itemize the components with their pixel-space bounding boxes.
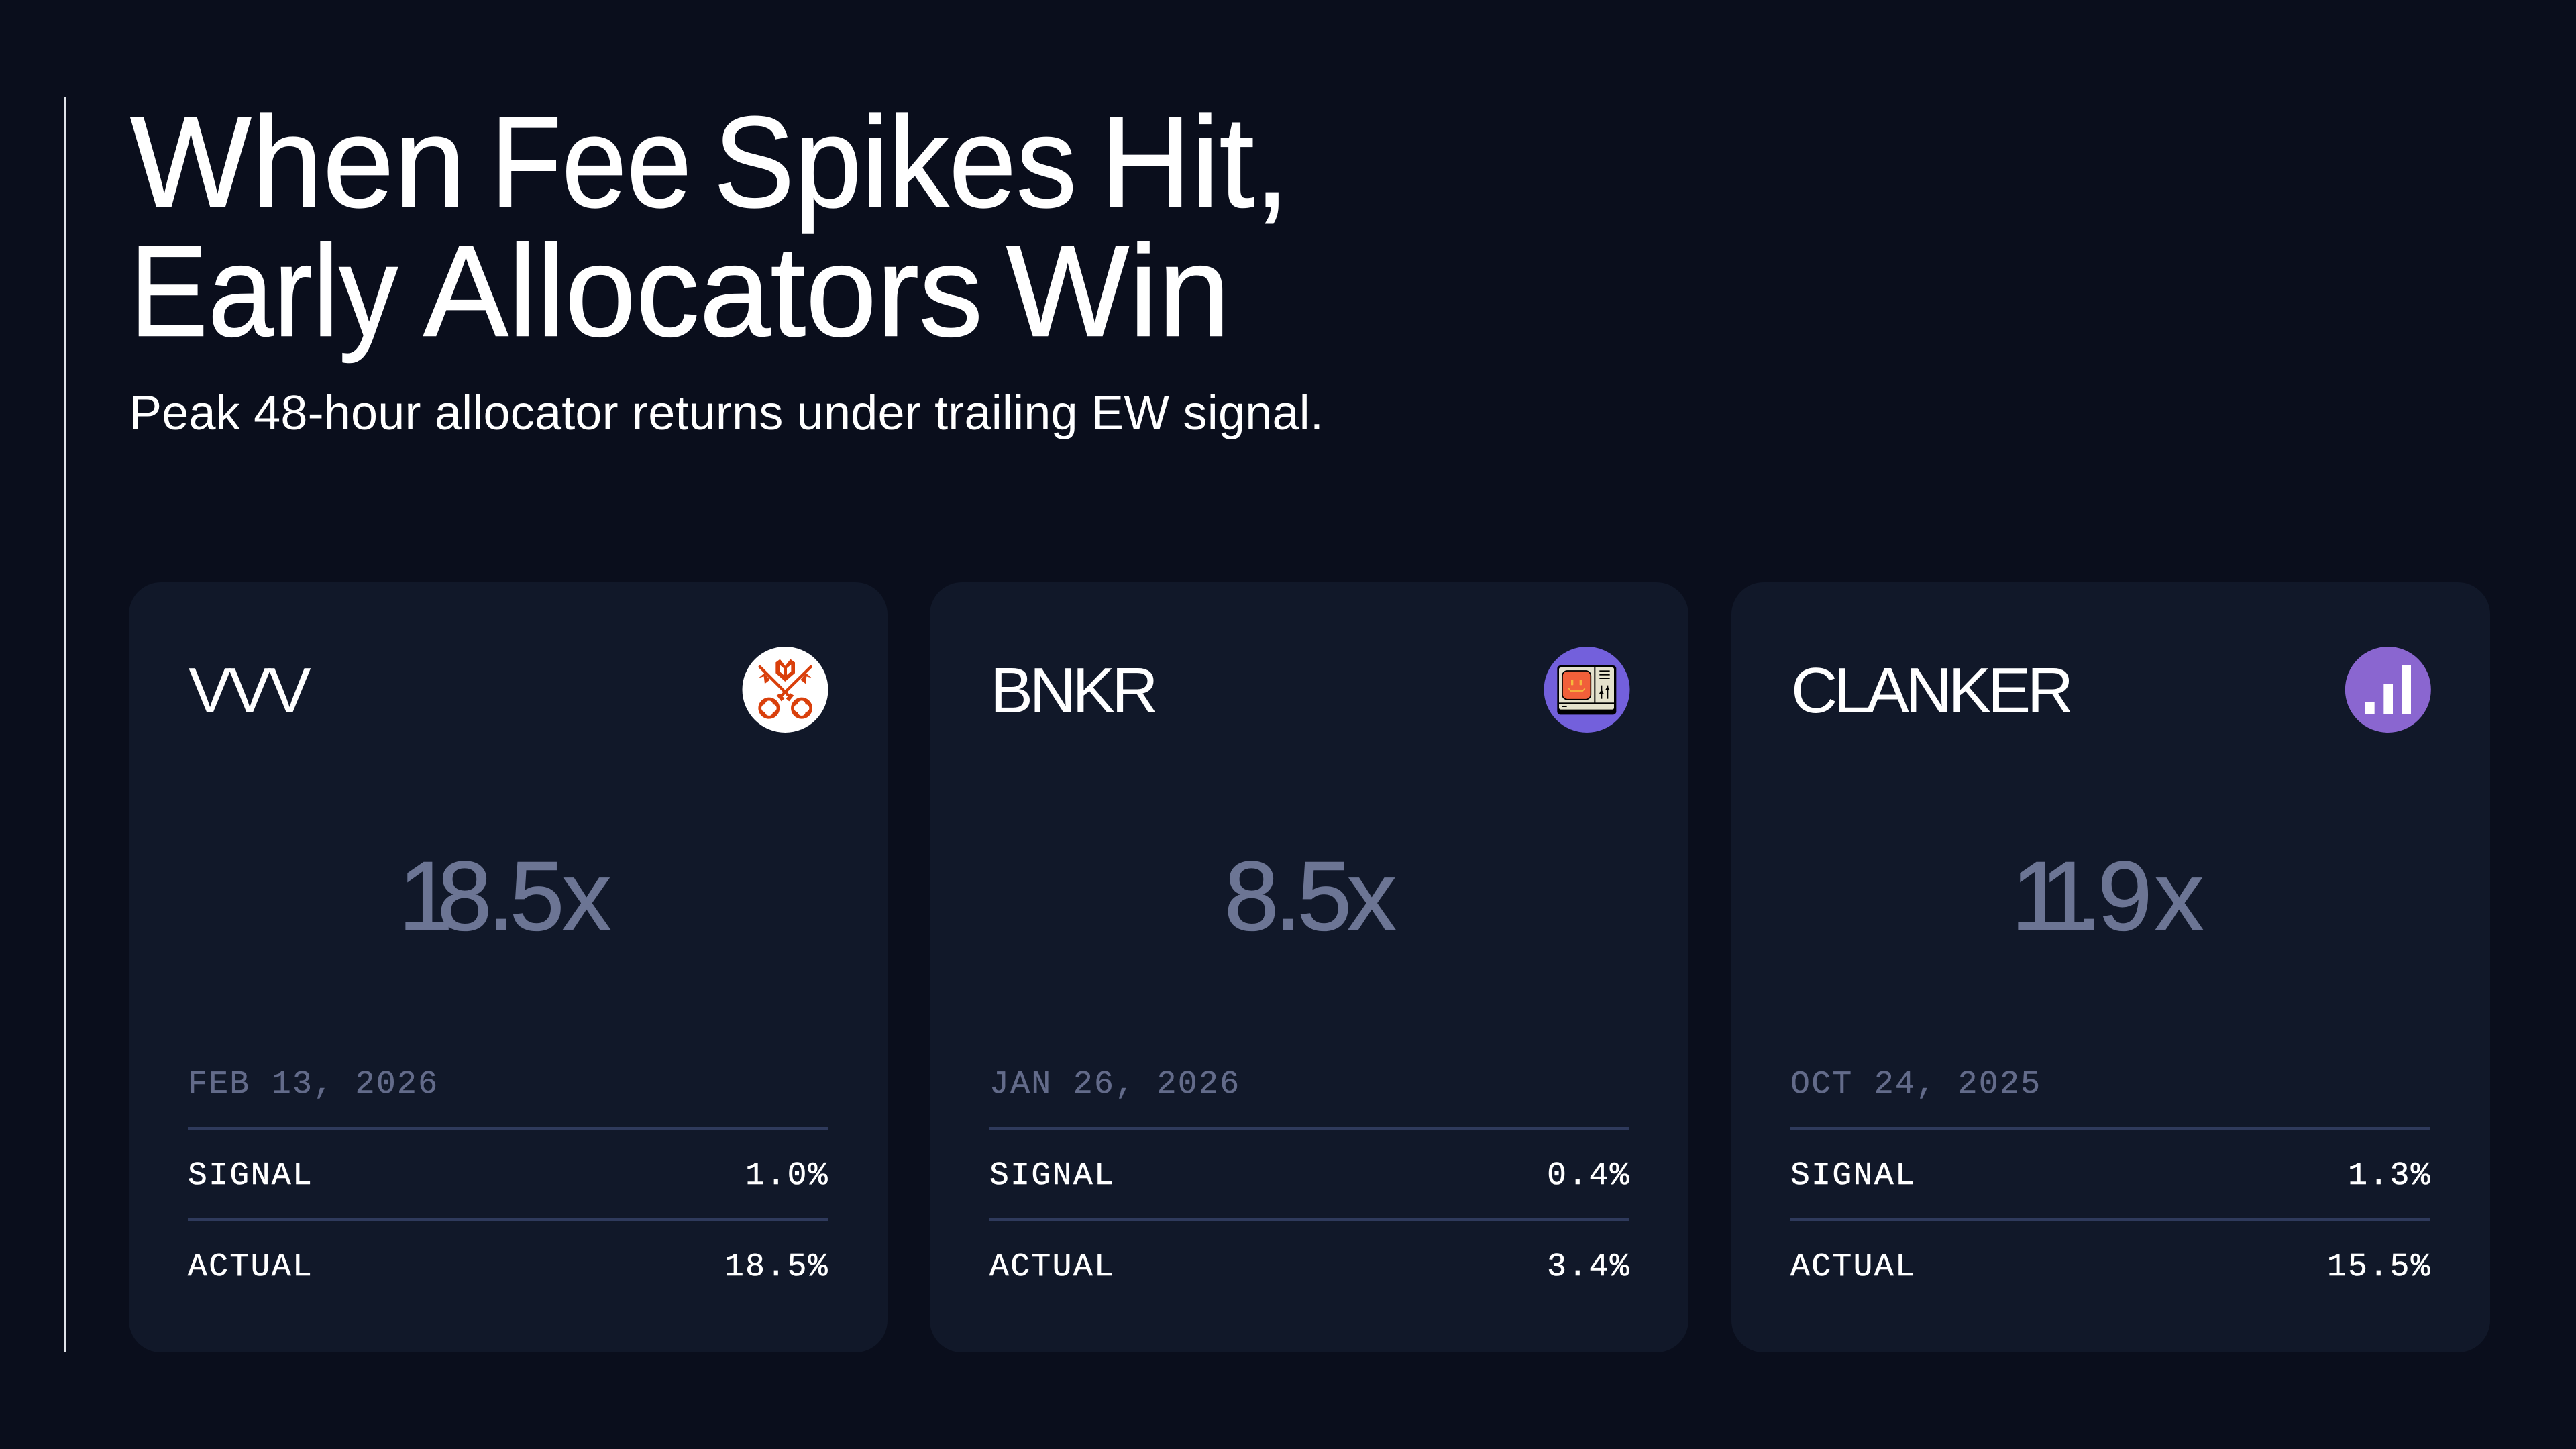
signal row: 1.3% xyxy=(2348,1158,2432,1194)
actual row: 15.5% xyxy=(2327,1249,2432,1285)
panel: BNKR xyxy=(930,582,1688,1352)
signal row xyxy=(188,1158,829,1194)
signal row: SIGNAL xyxy=(989,1158,1115,1194)
title xyxy=(129,89,1289,364)
actual row xyxy=(1790,1249,2432,1285)
panel: CLANKER xyxy=(1731,582,2490,1352)
BNKR name: BNKR xyxy=(990,655,1155,727)
actual row xyxy=(188,1249,829,1285)
title: When xyxy=(130,89,466,234)
VVV name: VVV xyxy=(189,655,311,727)
multiple value: 18.5x xyxy=(398,841,611,951)
actual row: ACTUAL xyxy=(1790,1249,1916,1285)
actual row xyxy=(989,1249,1631,1285)
signal row xyxy=(989,1158,1631,1194)
title: Spikes xyxy=(714,89,1077,234)
actual row: ACTUAL xyxy=(188,1249,313,1285)
signal row: 1.0% xyxy=(745,1158,829,1194)
title: Fee xyxy=(490,89,692,234)
accent vertical rule xyxy=(64,97,66,1352)
actual row: 3.4% xyxy=(1547,1249,1631,1285)
icon: signal bars xyxy=(2345,647,2431,733)
title: Early xyxy=(129,219,398,364)
signal row: SIGNAL xyxy=(1790,1158,1916,1194)
actual row: 18.5% xyxy=(724,1249,829,1285)
multiple value: 11.9x xyxy=(2011,841,2204,951)
signal row: 0.4% xyxy=(1547,1158,1631,1194)
icon: crossed keys xyxy=(742,647,828,733)
date: OCT 24, 2025 xyxy=(1790,1067,2041,1103)
subtitle: Peak 48-hour allocator returns under trailing EW signal. xyxy=(129,386,1324,440)
icon: retro computer xyxy=(1544,647,1629,733)
CLANKER name: CLANKER xyxy=(1791,655,2071,727)
signal row xyxy=(1790,1158,2432,1194)
title: Allocators xyxy=(423,219,983,364)
actual row: ACTUAL xyxy=(989,1249,1115,1285)
panel: VVV xyxy=(129,582,888,1352)
multiple value: 8.5x xyxy=(1224,841,1395,951)
date: FEB 13, 2026 xyxy=(188,1067,439,1103)
title: Hit, xyxy=(1100,89,1289,234)
signal row: SIGNAL xyxy=(188,1158,313,1194)
title: Win xyxy=(1006,219,1230,364)
date: JAN 26, 2026 xyxy=(989,1067,1240,1103)
